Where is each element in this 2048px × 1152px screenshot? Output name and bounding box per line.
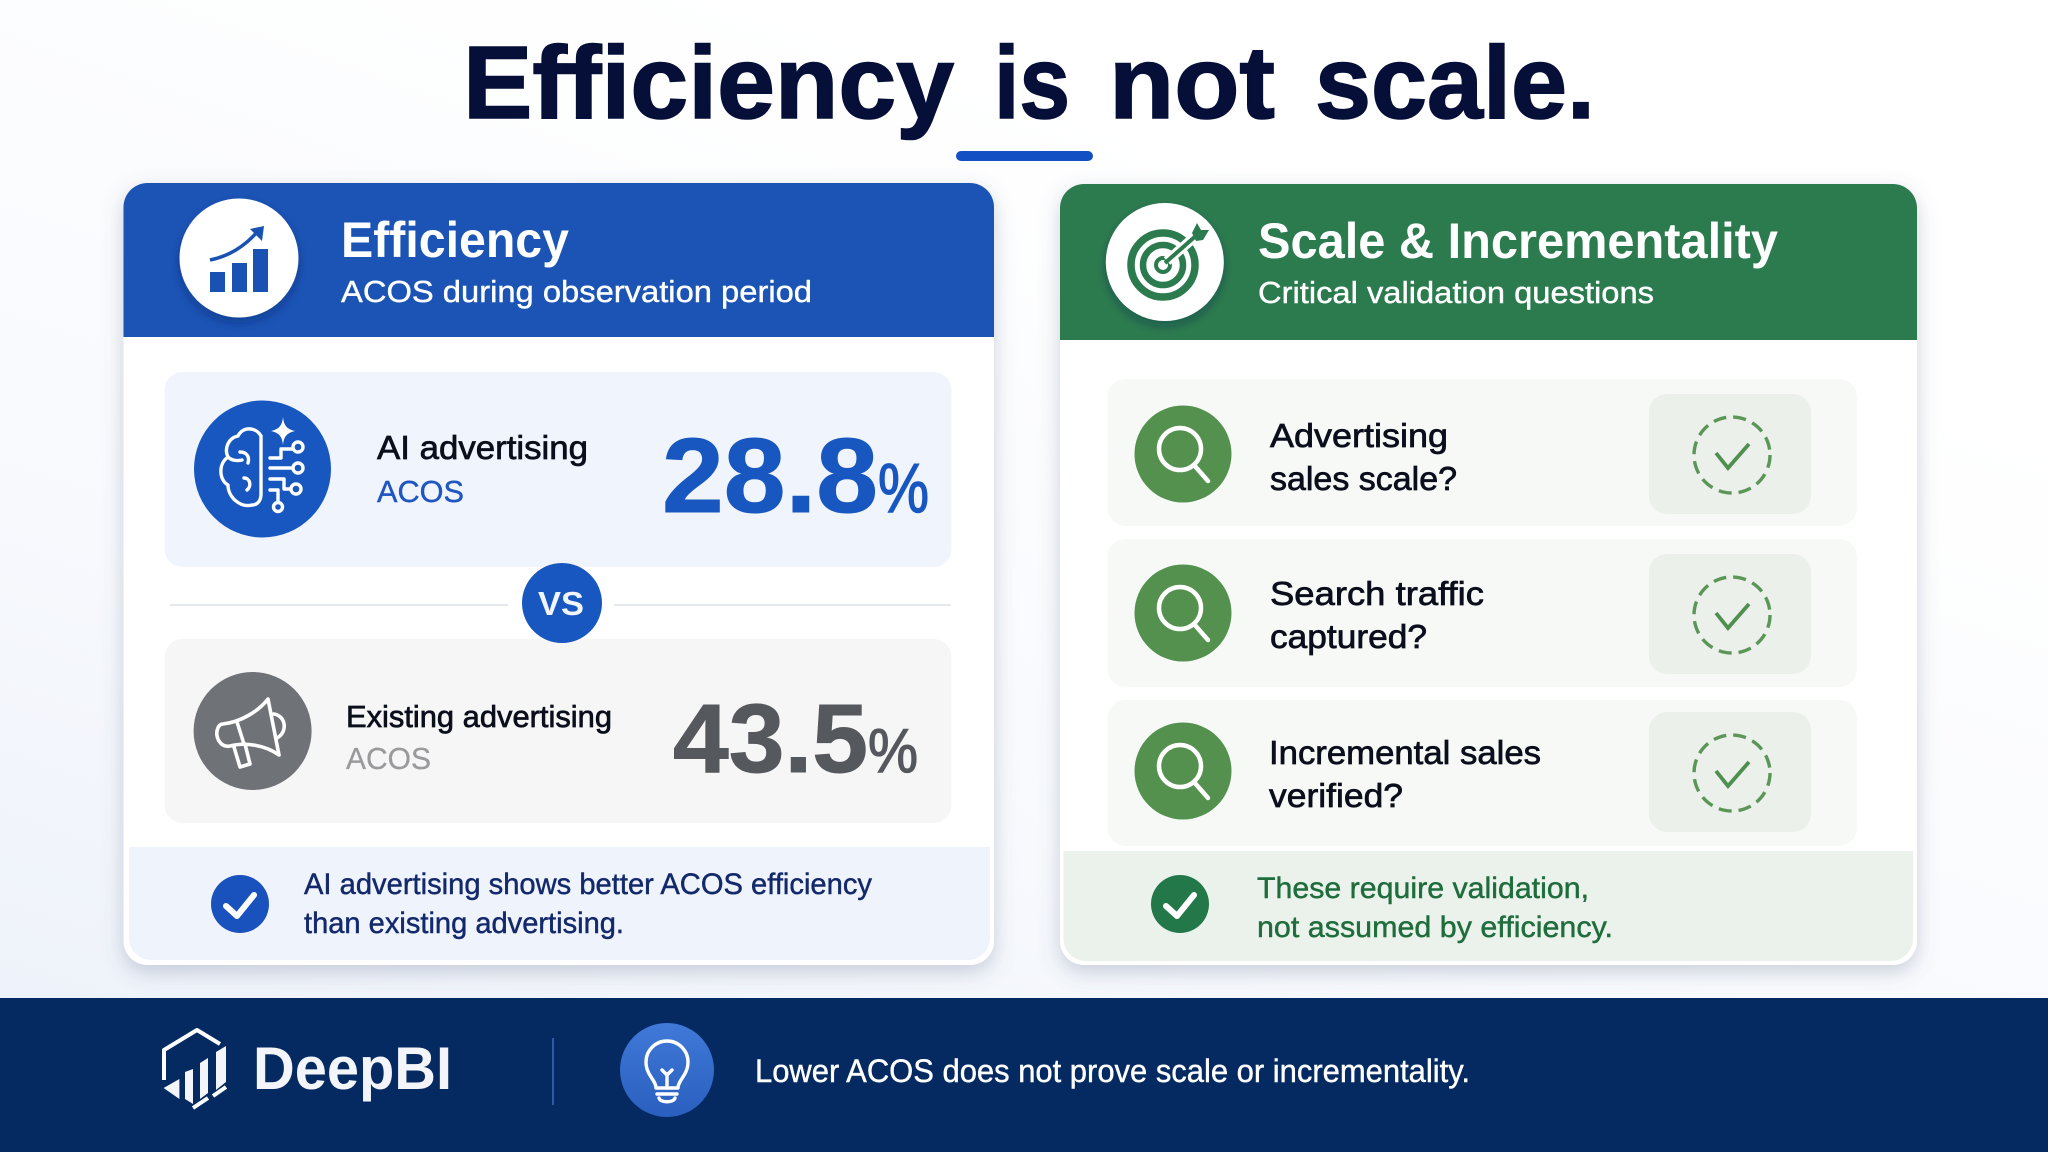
callout text — [1257, 872, 1613, 944]
scale header band — [1060, 184, 1917, 340]
value: 28.8%: 28.8 — [662, 417, 878, 535]
footer bar — [0, 998, 2048, 1152]
icon: dashed check badge — [1649, 554, 1811, 674]
panel: scale and incrementality — [1060, 184, 1917, 965]
logo: DeepBI wordmark: DeepBI — [253, 1035, 452, 1102]
row: incremental sales verified — [1108, 700, 1857, 846]
label: existing advertising: Existing advertising — [346, 699, 612, 734]
question text: sales scale? — [1270, 460, 1457, 497]
icon: megaphone — [194, 672, 312, 790]
icon: blue check — [211, 875, 269, 933]
icon: magnifier — [1134, 722, 1232, 820]
icon: magnifier — [1134, 406, 1232, 502]
icon: magnifier — [1134, 564, 1232, 662]
scale card background — [1060, 184, 1917, 965]
row: search traffic captured — [1108, 539, 1857, 687]
icon: target with arrow — [1106, 203, 1224, 321]
value: 43.5%: % — [868, 717, 918, 786]
label: ACOS blue: ACOS — [377, 474, 464, 509]
scale heading: Scale & Incrementality — [1258, 213, 1778, 269]
question text: verified? — [1269, 777, 1403, 814]
efficiency header band — [124, 183, 994, 337]
callout text: than existing advertising. — [304, 907, 624, 940]
efficiency subheading: ACOS during observation period — [341, 274, 812, 309]
efficiency heading: Efficiency — [341, 212, 569, 268]
value: 43.5%: 43.5 — [673, 684, 868, 793]
logo: DeepBI mark — [164, 1030, 226, 1108]
question text: Advertising — [1270, 417, 1448, 454]
title: Efficiency — [463, 25, 954, 140]
callout text: not assumed by efficiency. — [1257, 911, 1613, 944]
icon: green check — [1151, 875, 1209, 933]
icon: dashed check badge — [1649, 394, 1811, 514]
vs divider: VS — [538, 585, 584, 622]
question text: Search traffic — [1270, 575, 1484, 612]
title — [463, 25, 1595, 140]
label: ACOS grey: ACOS — [346, 741, 431, 776]
label: AI advertising: AI advertising — [377, 429, 588, 466]
icon: dashed check badge — [1649, 712, 1811, 832]
title: not — [1109, 25, 1275, 140]
row: advertising sales scale — [1108, 379, 1857, 526]
scale subheading: Critical validation questions — [1258, 275, 1654, 310]
footer message: Lower ACOS does not prove scale or incrementality. — [755, 1053, 1470, 1089]
vs divider — [170, 563, 951, 643]
footer divider — [552, 1038, 554, 1105]
callout: scale conclusion — [1064, 851, 1913, 961]
row: existing advertising — [164, 639, 952, 823]
row: AI advertising — [164, 372, 952, 567]
question text — [1269, 734, 1541, 814]
callout text — [304, 868, 872, 940]
title: is — [994, 25, 1070, 140]
callout text: These require validation, — [1257, 872, 1589, 905]
question text: Incremental sales — [1269, 734, 1541, 771]
question text: captured? — [1270, 618, 1427, 655]
icon: rising bar chart — [180, 198, 298, 318]
title underline — [956, 151, 1093, 161]
value: 28.8%: % — [878, 449, 929, 527]
panel: efficiency — [124, 183, 994, 965]
question text — [1270, 417, 1457, 497]
efficiency card background — [124, 183, 994, 965]
question text — [1270, 575, 1484, 655]
callout: efficiency conclusion — [129, 847, 990, 960]
icon: AI brain — [194, 400, 331, 538]
title: scale. — [1315, 25, 1595, 140]
callout text: AI advertising shows better ACOS efficiency — [304, 868, 872, 901]
icon: light bulb — [620, 1023, 714, 1117]
